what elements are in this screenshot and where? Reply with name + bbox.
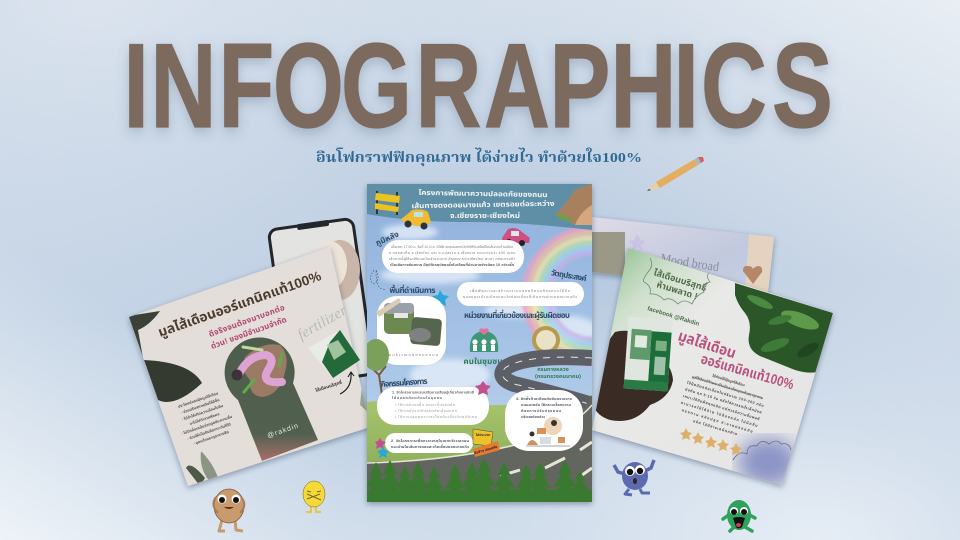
icon: mountain (555, 184, 592, 225)
badge text: facebook @Rakdin (646, 306, 700, 328)
panel: central poster (364, 182, 596, 508)
text bubble: activity 1: • ให้การขับรถให้ปลอดภัยเมื่อฝนตก (395, 408, 457, 413)
handle text: @rakdin (266, 422, 300, 440)
card body text: ใช้ปุ๋ยมีผลต่อเนื่องในปริมาณ 100-300 กรัม (687, 380, 765, 408)
warning sign yellow (473, 429, 493, 446)
badge text (646, 266, 709, 328)
label: community: คนในชุมชน (464, 357, 502, 366)
icon: community (470, 328, 498, 352)
star (628, 234, 646, 250)
text bubble: activity 1: 1. จัดโครงการอบรมเสริมการเรียนรู้เกี่ยวกับการขับขี่ (392, 389, 474, 394)
photo strip (592, 232, 625, 276)
text bubble: activity 3: ถนนลาดชัน ให้ทราบเรื่องความ (521, 402, 572, 407)
text bubble: activity 3: บริเวณดังกล่าว (521, 415, 545, 419)
rainbow (522, 228, 592, 368)
text bubble: activity 1 (377, 387, 489, 425)
badge text: ไส้เดือนบริสุทธิ์ (652, 266, 709, 293)
icon: pencil (647, 157, 704, 191)
card heading: มูลไส้เดือนออร์แกนิคแท้100% (156, 268, 324, 342)
card subheading: ดีจริงจนต้องมาบอกต่อ (207, 301, 286, 339)
label: highways (535, 367, 581, 380)
leaf right (360, 389, 366, 411)
character: yellow (303, 481, 325, 512)
badge text: ห้ามพลาด ! (655, 279, 699, 301)
card heading (675, 327, 796, 392)
sky (367, 214, 592, 405)
panel: left card (128, 247, 371, 486)
photo caption: ถนนบริเวณดอยหมอกบน (382, 353, 438, 357)
text bubble: activity 2: 2. จัดโครงการเพื่อหาสาเหตุในเขตบริเวณถนน (391, 438, 470, 443)
warning sign orange (473, 441, 500, 457)
panel: mood board card (590, 217, 776, 292)
heart (743, 266, 762, 284)
text bubble: objective: เพื่อพัฒนาและสร้างความปลอดภัยบนท้องถนนให้กับ (470, 288, 570, 293)
fertilizer bag (624, 317, 673, 391)
icon: pink car (502, 228, 530, 246)
icon: yellow car (401, 209, 431, 230)
scalloped corner (733, 441, 791, 460)
header title: จ.เชียงราย-เชียงใหม่ (450, 212, 521, 220)
star pink small (375, 438, 386, 449)
leaf middle (144, 360, 202, 402)
arrow (340, 373, 351, 394)
card body text: ตรงตาม หลังปลูก สะอาดปลอดภัย (681, 408, 753, 434)
card body text: - ช่วยให้เม็ดดินยึดเกาะกันได้ดี (186, 421, 232, 441)
arrow tip (348, 372, 354, 377)
text bubble: area photos (376, 296, 446, 365)
card heading: มูลไส้เดือน (675, 327, 738, 363)
mood board label: Mood broad (660, 250, 721, 274)
scalloped badge (644, 258, 712, 304)
pine trees (362, 458, 592, 502)
header title: โครงการพัฒนาความปลอดภัยของถนน (418, 189, 548, 199)
subtitle: อินโฟกราฟฟิกคุณภาพ ได้ง่ายไว ทำด้วยใจ100% (316, 147, 642, 166)
panel: front right card (592, 248, 833, 486)
photo: roadside (384, 303, 414, 334)
leaf top left (128, 311, 160, 358)
header title: เส้นทางดงดอยนางแก้ว เขตรอยต่อระหว่าง (411, 200, 555, 210)
stars rating (680, 428, 742, 455)
character: green (723, 500, 755, 531)
soil (243, 344, 287, 397)
warning sign yellow: ไม่ประมาท (476, 433, 491, 437)
card body text: จะไม่ไปทำลายพืชผล (189, 411, 221, 426)
fertilizer script: fertilizer (295, 303, 350, 343)
plant photo (735, 283, 833, 373)
card subheading: ด่วน! ของมีจำนวนจำกัด (209, 313, 288, 351)
leaf bottom (186, 466, 205, 483)
card body text: ต่อต้น ทุก 5-15 วัน หลังใส่ควรรดน้ำเล็กน้อย (684, 386, 762, 415)
icon: seal (532, 326, 560, 354)
card body text (676, 366, 769, 442)
text bubble: objective (457, 282, 584, 306)
road curve dashes (502, 357, 592, 405)
heading: agencies: หน่วยงานที่เกี่ยวข้องและผู้รับผิดชอบ (464, 309, 570, 320)
text bubble: activity 1: ให้ปลอดภัยแก่คนในชุมชน (392, 395, 443, 400)
heading: objective: วัตถุประสงค์ (550, 267, 587, 283)
lower road edge (367, 405, 592, 463)
text bubble: background: เมื่อเวลา 17.00 น. วันที่ 10 มิ.ย. 2566 พายุฝนตกหนักทำให้ดินสไลด์ปิดเส้นทางบ้านเมือง (391, 244, 513, 249)
grass hills (367, 395, 592, 502)
keyhole (225, 337, 318, 461)
label: highways: กรมทางหลวง (537, 367, 569, 373)
heading: activities: กิจกรรมโครงการ (380, 377, 428, 389)
text bubble: activity 3: 3. ติดตั้งป้ายเตือนภัยอันตรายจาก (516, 396, 573, 401)
header band (367, 184, 592, 230)
wood texture tile (745, 234, 776, 292)
icon: meeting people (526, 417, 570, 446)
text bubble: activity 3 (505, 390, 583, 451)
clouds (380, 224, 598, 391)
fertilizer bag (308, 330, 360, 378)
character: blue (614, 460, 654, 495)
star pink (475, 381, 491, 395)
text bubble: background (382, 240, 524, 273)
card body text: มูลไส้เดือนมีลักษณะเป็นเม็ดละเอียดอุดมด้วยธาตุอาหาร (692, 374, 764, 400)
warning sign orange: ขับช้าๆ ปลอดภัย (473, 444, 498, 455)
phone mockup (267, 217, 376, 387)
star blue small (377, 446, 389, 458)
tape (376, 298, 401, 317)
star (432, 290, 449, 306)
card body text: สามารถใช้ได้ง่าย ไม่ต้องหมัก ไม่มีกลิ่น (680, 400, 759, 428)
text bubble: activity 3: ต้องการปรับปรุงถนน (521, 408, 562, 413)
character: brown (213, 489, 244, 531)
photo: road repair (410, 317, 442, 346)
card subheading (207, 301, 288, 351)
text bubble: background: เส้นทางนี้ผู้ใช้รถใช้ถนนเป็นจำนวนมาก สัญจรระหว่างเชียงใหม่ พะเยา ดอยนางแก้ว (389, 256, 515, 261)
icon: road barrier (375, 191, 400, 215)
arrow caption: ไส้เดือนบริสุทธิ์ (314, 378, 344, 394)
header title (411, 189, 555, 220)
heading: area: พื้นที่ดำเนินการ (389, 284, 435, 295)
text bubble: activity 2: และผ่านในเส้นทางดอยสะเก็ดเชื่อมดอยนางแก้ว (391, 444, 469, 449)
card body text: ประโยชน์ของปุ๋ยมูลไส้เดือน (177, 390, 219, 409)
card heading: ออร์แกนิคแท้100% (699, 351, 796, 392)
card body text: เหมาะใช้กับพืชทุกชนิด แต่ควรมีความชื้นพอดี (682, 393, 761, 421)
text bubble: activity 1: • ให้การขับรถขึ้น-ลงเขาที่ปลอดภัย (395, 402, 455, 407)
decorative dashed heart (370, 270, 386, 290)
card body text: ไส้ก่อนใช้ปุ๋ยมูลไส้เดือน (712, 373, 746, 388)
text bubble: background: อ.ดอยสะเก็ด จ.เชียงใหม่ และ อ.แม่สรวย จ.เชียงราย ระยะทางกว่า 400 เมตร (389, 250, 515, 255)
road dashes (500, 442, 592, 478)
label: highways: (กรมทรวงคมนาคม) (535, 374, 581, 380)
heading: background: ภูมิหลัง (374, 229, 401, 248)
tree left (363, 339, 389, 395)
card body text: - ไม่ทำให้เกิดความร้อนในดิน (181, 403, 224, 422)
compost mound (593, 331, 673, 421)
text bubble: objective: ชุมชนชาวบ้านเมืองและนักท่องเที่ยวที่เดินทางผ่านดอยนางแก้ว (463, 294, 577, 299)
lower road (367, 395, 592, 502)
text bubble: activity 1: • ให้การปฐมพยาบาลเบื้องต้นเมื่อเกิดอุบัติเหตุ (395, 414, 478, 419)
title: INFOGRAPHICS (124, 19, 833, 153)
text bubble: background: เป็นเส้นทางอันตราย มีอุบัติเหตุบ่อยครั้งในเดือนที่ผ่านมาอย่างน้อย 10 กว่าครั้ง (390, 262, 514, 267)
card body text: - ไม่มีกลิ่นเหม็นช่วยดูดซับความชื้น (181, 414, 233, 436)
blue glow (738, 438, 798, 486)
road curve (502, 357, 592, 405)
text bubble: activity 2 (385, 433, 473, 453)
card body text (172, 388, 238, 449)
card body text: - ช่วยปรับสภาพดินให้ดีขึ้น (180, 397, 221, 415)
card body text: - อุดมด้วยธาตุอาหารพืช (193, 429, 230, 446)
worm (238, 355, 282, 382)
card body text: ชนิด ไม่มีสารเคมีตกค้าง (693, 418, 738, 436)
